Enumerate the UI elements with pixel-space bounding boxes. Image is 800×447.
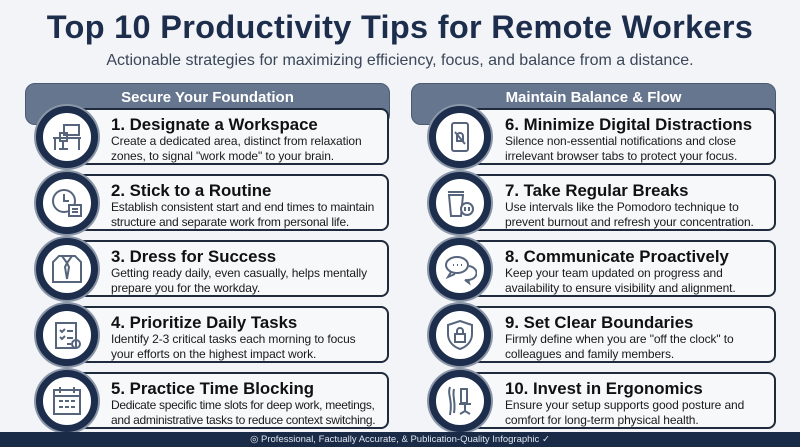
card 8: Keep your team updated on progress and	[505, 266, 723, 280]
icon: shield	[429, 304, 491, 366]
card 2: 2. Stick to a Routine	[111, 181, 271, 200]
card 4: your efforts on the highest impact work.	[111, 346, 316, 360]
footer: ◎ Professional, Factually Accurate, & Publication-Quality Infographic ✓	[250, 434, 550, 445]
card 3: 3. Dress for Success	[111, 247, 276, 266]
card 5: Dedicate specific time slots for deep work, meetings,	[111, 398, 375, 412]
card 3: prepare you for the workday.	[111, 280, 260, 294]
icon: clock	[36, 172, 98, 234]
card 10	[469, 372, 776, 429]
icon: chair	[429, 370, 491, 432]
card 3: Getting ready daily, even casually, helps mentally	[111, 266, 367, 280]
icon: calendar	[36, 370, 98, 432]
card 5: 5. Practice Time Blocking	[111, 379, 314, 398]
icon: coffee	[429, 172, 491, 234]
card 4: Identify 2-3 critical tasks each morning to focus	[111, 332, 356, 346]
card 9	[469, 306, 776, 363]
card 5: and administrative tasks to reduce context switching.	[111, 412, 375, 426]
card 7: Use intervals like the Pomodoro technique to	[505, 200, 739, 214]
subtitle: Actionable strategies for maximizing efficiency, focus, and balance from a distance.	[106, 52, 694, 69]
card 3	[75, 240, 389, 297]
card 6: 6. Minimize Digital Distractions	[505, 115, 752, 134]
card 7: 7. Take Regular Breaks	[505, 181, 688, 200]
card 4: 4. Prioritize Daily Tasks	[111, 313, 297, 332]
card 9: colleagues and family members.	[505, 346, 674, 360]
title: Top 10 Productivity Tips for Remote Workers	[47, 9, 753, 45]
card 4	[75, 306, 389, 363]
card 8	[469, 240, 776, 297]
card 2: Establish consistent start and end times to maintain	[111, 200, 374, 214]
icon: shirt	[36, 238, 98, 300]
card 8: 8. Communicate Proactively	[505, 247, 729, 266]
card 5	[75, 372, 389, 429]
card 8: availability to ensure visibility and alignment.	[505, 280, 736, 294]
card 2: structure and separate work from personal life.	[111, 214, 349, 228]
icon: checklist	[36, 304, 98, 366]
card 6	[469, 108, 776, 165]
panel header: left	[25, 83, 390, 125]
card 9: Firmly define when you are "off the clock" to	[505, 332, 734, 346]
icon: desk	[36, 106, 98, 168]
card 7: prevent burnout and refresh your concentration.	[505, 214, 754, 228]
card 1: zones, to signal "work mode" to your brain.	[111, 148, 334, 162]
panel header: left: Secure Your Foundation	[121, 89, 294, 106]
card 7	[469, 174, 776, 231]
card 1: Create a dedicated area, distinct from relaxation	[111, 134, 362, 148]
footer	[0, 432, 800, 447]
card 6: irrelevant browser tabs to protect your focus.	[505, 148, 737, 162]
icon: chat	[429, 238, 491, 300]
panel header: right: Maintain Balance & Flow	[506, 89, 681, 106]
card 9: 9. Set Clear Boundaries	[505, 313, 693, 332]
card 10: comfort for long-term physical health.	[505, 412, 699, 426]
card 10: 10. Invest in Ergonomics	[505, 379, 703, 398]
card 6: Silence non-essential notifications and close	[505, 134, 736, 148]
panel header: right	[411, 83, 776, 125]
card 2	[75, 174, 389, 231]
card 10: Ensure your setup supports good posture and	[505, 398, 744, 412]
card 1: 1. Designate a Workspace	[111, 115, 318, 134]
card 1	[75, 108, 389, 165]
icon: phone	[429, 106, 491, 168]
